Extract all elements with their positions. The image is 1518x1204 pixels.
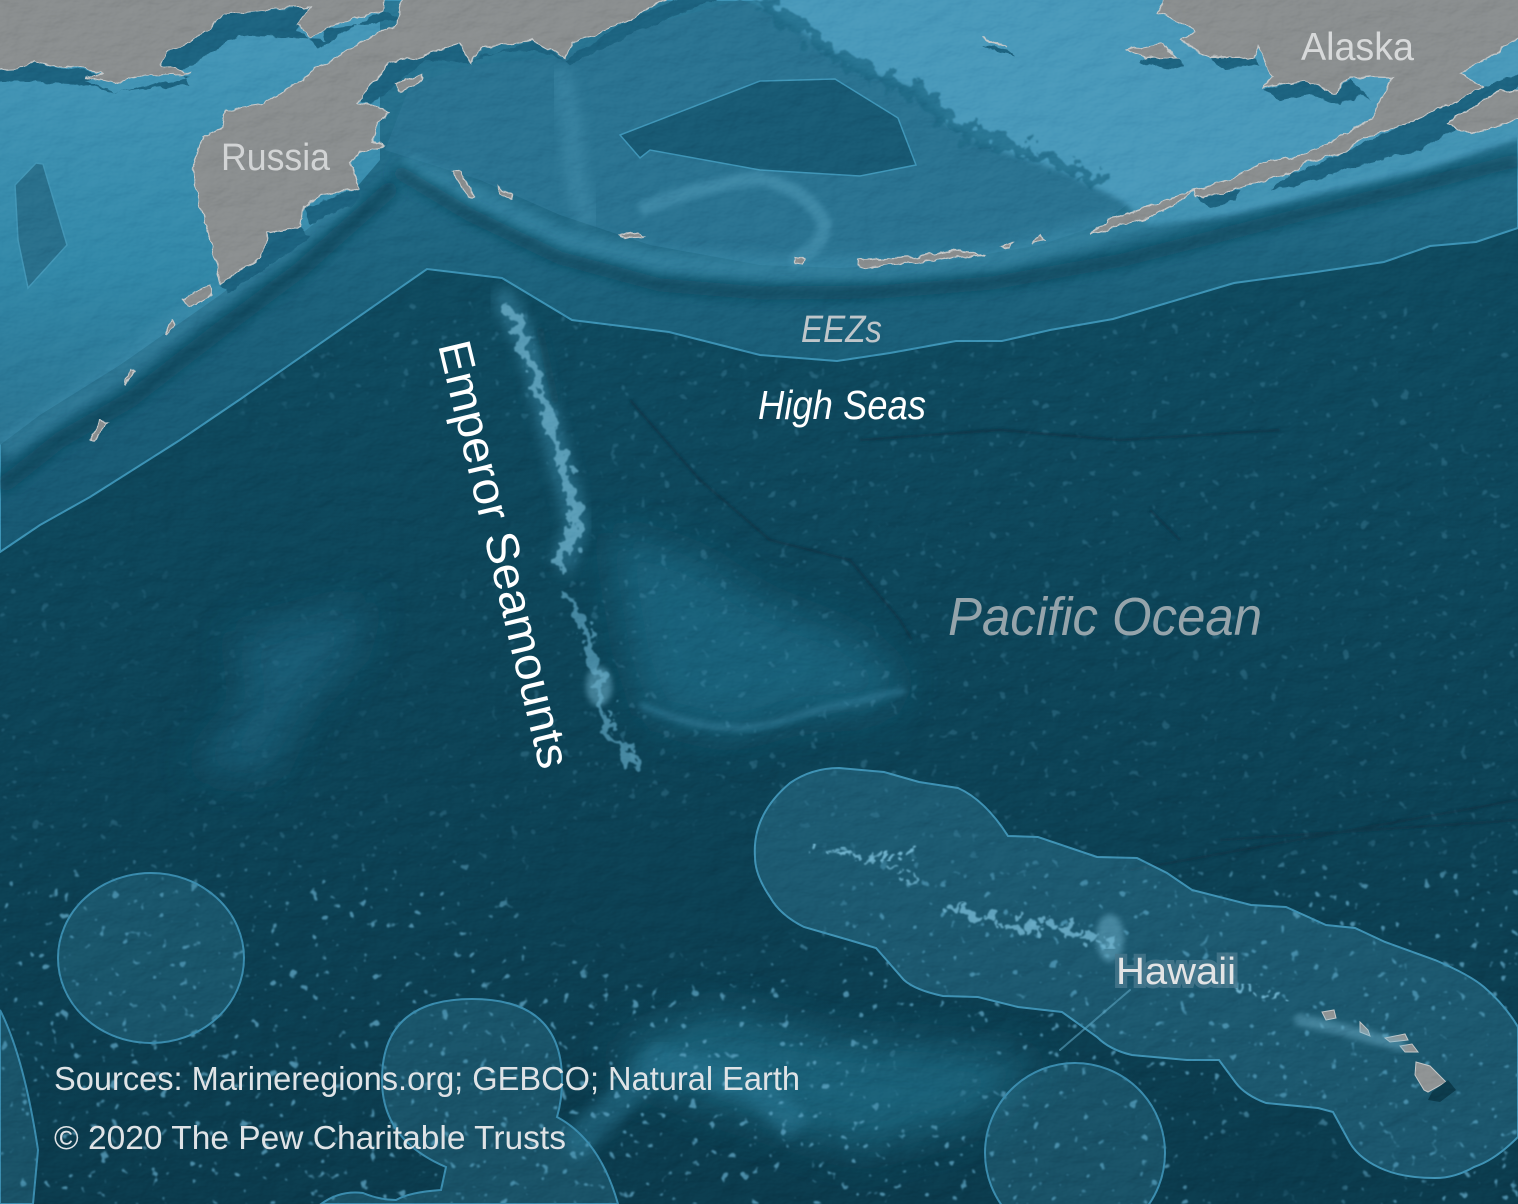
circle EEZ left (58, 873, 244, 1043)
Hawaii EEZ (755, 768, 1518, 1178)
land shadows (0, 0, 1518, 293)
Hawaiian ridge seamounts (815, 845, 1400, 1050)
label: Hawaii: Hawaii (1116, 951, 1236, 993)
Shirshov Ridge (560, 70, 590, 225)
Bowers Ridge (640, 178, 825, 262)
North Pacific EEZ band (0, 0, 1518, 552)
St Lawrence Island (1127, 43, 1176, 58)
Kamchatka (191, 0, 698, 283)
Emperor Seamounts ridge (505, 300, 635, 765)
label: High Seas: High Seas (758, 382, 926, 428)
Kodiak (1447, 90, 1518, 135)
fracture zones (630, 400, 1518, 870)
label: Alaska: Alaska (1301, 26, 1414, 69)
plateaus and rises (190, 530, 1040, 1150)
circle EEZ left edge (0, 1010, 38, 1204)
Okhotsk high seas pocket (15, 163, 67, 288)
circle EEZ centre (321, 999, 618, 1204)
Bering Sea basin (385, 0, 1140, 268)
Commander Islands (452, 172, 475, 197)
Sakhalin south tip and Kurils (182, 285, 212, 307)
Sea of Okhotsk (0, 0, 380, 445)
Russia north coast (0, 0, 388, 82)
seamount speck field (0, 300, 1518, 1204)
label: Pacific Ocean: Pacific Ocean (948, 587, 1262, 647)
circle EEZ Johnston (985, 1063, 1165, 1204)
Bering high seas donut hole (620, 79, 916, 176)
Bering Sea shelf (740, 0, 1518, 225)
land (0, 0, 1518, 440)
Alaska (1159, 0, 1518, 197)
label: Emperor Seamounts: Emperor Seamounts (428, 335, 581, 773)
Aleutian Islands (1090, 190, 1195, 236)
label: Russia: Russia (221, 137, 331, 179)
Kuril slope and trench (0, 185, 395, 488)
Aleutian arc and trench (395, 120, 1518, 293)
Hawaii island shadow (1428, 1080, 1456, 1102)
source credit: Sources: Marineregions.org; GEBCO; Natural Earth (54, 1060, 800, 1097)
Hawaiian Islands (1322, 1010, 1446, 1092)
St Matthew Island (983, 38, 1007, 47)
label: EEZs: EEZs (801, 309, 882, 351)
seamount circles: other EEZs (0, 873, 1165, 1204)
copyright: © 2020 The Pew Charitable Trusts (54, 1119, 566, 1156)
Karaginsky (395, 75, 422, 92)
